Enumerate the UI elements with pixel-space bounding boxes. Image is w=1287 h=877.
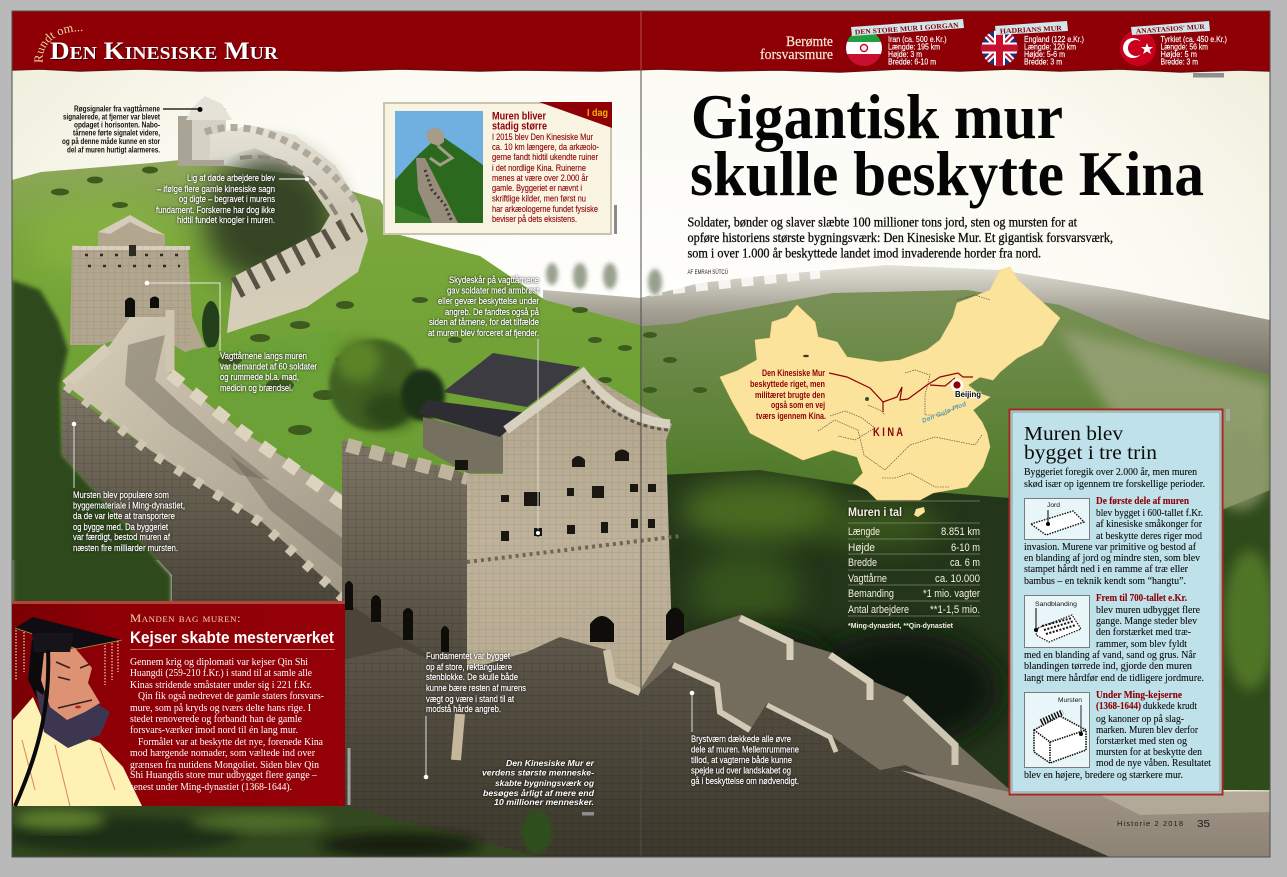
callout: Brystværn: gå i beskyttelse om nødvendigt.: [691, 776, 799, 787]
loopholes: [501, 450, 656, 541]
Beijing marker: Beijing: [955, 389, 981, 399]
body text: [492, 131, 599, 224]
forest on left edge: [12, 280, 172, 610]
step three text: (1368-1644): [1096, 701, 1141, 712]
table rows: Bredde: [848, 557, 877, 569]
left face merlons: [347, 445, 468, 478]
table rows: **1-1,5 mio.: [930, 604, 980, 616]
callout: Fundamentet: kunne bære resten af murens: [426, 683, 526, 694]
Gorgan facts: [888, 34, 947, 66]
left face of tower: [342, 440, 467, 672]
wall tag: Hadrian: HADRIANS MUR: [1000, 24, 1063, 35]
red corner: I dag: I dag: [587, 107, 608, 119]
heading: stadig større: [492, 120, 547, 132]
heading: [492, 110, 547, 132]
callout: Fundamentet: [424, 651, 526, 779]
body text: mod hærgende nomader, som væltede ind over: [130, 748, 315, 759]
step two text: blandingen tørrede ind, gjorde den muren: [1024, 661, 1192, 672]
body text: senest under Ming-dynastiet (1368-1644).: [130, 782, 292, 793]
body text: gamle. Byggeriet er nævnt i: [492, 182, 582, 193]
crown board: [15, 617, 122, 649]
map note: også som en vej: [771, 400, 825, 410]
panel: Manden bag muren: [12, 601, 345, 806]
step three text: blev en højere, bredere og stærkere mur.: [1024, 770, 1183, 781]
body text: forsvars-værker imod nord til én lang mur.: [130, 725, 298, 736]
grey end tag: [582, 812, 594, 816]
step two text: blev muren udbygget flere: [1096, 605, 1200, 616]
step two text: [1024, 593, 1204, 684]
wall tag: Hadrian: [995, 21, 1068, 35]
Anastasios facts: [1160, 34, 1227, 66]
header band with torn edge: [12, 11, 1270, 72]
callout: Skydeskår: [428, 275, 542, 537]
label: Berømte forsvarsmure: Berømte: [786, 34, 833, 50]
left face lower: [342, 600, 426, 656]
diagram: Jord: [1024, 498, 1090, 540]
callout: Brystværn: tillod, at vagterne både kunne: [691, 755, 792, 766]
grey end tag: [614, 205, 617, 234]
callout: Røgsignaler: del af muren hurtigt alarmeres.: [67, 145, 160, 155]
front wall: [467, 371, 672, 700]
step three text: [1024, 690, 1211, 781]
hair: [28, 640, 76, 700]
table rows: *1 mio. vagter: [923, 588, 980, 600]
intro paragraph: som i over 1.000 år beskyttede landet imod invaderende horder fra nord.: [688, 246, 1041, 261]
Yellow River label: Den Gule Flod: [921, 400, 968, 425]
callout: Mursten: da de var lette at transportere: [73, 511, 175, 522]
callout: Lig af døde arbejdere: fundament. Forskerne har dog ikke: [156, 205, 275, 216]
byline: AF EMRAH SÜTCÜ: [688, 269, 728, 276]
shrubs on hills: [51, 166, 707, 435]
callout: Røgsignaler: [62, 104, 202, 155]
step three text: dukkede krudt: [1143, 701, 1197, 712]
closing italic statement: verdens største menneske-: [482, 768, 594, 778]
wall tag: Gorgan: DEN STORE MUR I GORGAN: [855, 21, 959, 36]
table rows: Bemanding: [848, 588, 894, 600]
grey end tag: [1193, 73, 1224, 78]
rivers: [818, 295, 990, 487]
kicker: Rundt om: Rundt om...: [34, 26, 82, 63]
China shape: [720, 267, 1060, 500]
wall walkway in foreground left: [62, 310, 352, 612]
Anastasios facts: Længde: 56 km: [1160, 42, 1208, 52]
main headline: skulle beskytte Kina: [690, 138, 1204, 209]
step three text: mursten for at beskytte den: [1096, 747, 1202, 758]
Hadrian facts: Længde: 120 km: [1024, 42, 1076, 52]
callout: Skydeskår: Skydeskår på vagttårnene: [449, 275, 539, 286]
callout: Lig af døde arbejdere: hidtil fundet knogler i muren.: [177, 215, 275, 226]
callout: Mursten: var færdigt, bestod muren af: [73, 532, 170, 543]
folio: Historie 2 2018, page 35: 35: [1197, 819, 1211, 830]
right hillside: [640, 290, 1270, 510]
label: Berømte forsvarsmure: forsvarsmure: [760, 47, 833, 63]
intro paragraph: [688, 215, 1113, 261]
black cord: [15, 650, 48, 806]
body text: har arkæologerne fundet fysiske: [492, 203, 598, 214]
callout: Skydeskår: angreb. De fandtes også på: [445, 307, 540, 318]
KINA label: K I N A: [873, 427, 903, 439]
table rows: [848, 526, 980, 616]
section title: [34, 26, 280, 65]
callout: Lig af døde arbejdere: og digte – begravet i murens: [179, 194, 275, 205]
kicker: Manden bag muren:: [130, 613, 241, 625]
step one text: stampet hårdt ned i en ramme af træ eller: [1024, 564, 1189, 575]
body text: Qin fik også nedrevet de gamle staters forsvars-: [138, 691, 324, 702]
step one text: bambus – en teknik kendt som “hangtu”.: [1024, 576, 1186, 587]
folio: Historie 2 2018, page 35: Historie 2 2018: [1117, 819, 1183, 828]
map note: Den Kinesiske Mur: [762, 368, 825, 378]
callout: Mursten: næsten fire milliarder mursten.: [73, 543, 178, 554]
grass highlights: [46, 218, 120, 268]
intro: [1024, 467, 1205, 490]
body text: beviser på dets eksistens.: [492, 213, 577, 224]
heading: bygget i tre trin: [1024, 442, 1157, 464]
tassels: [16, 630, 118, 685]
callout: Fundamentet: vægt og være i stand til at: [426, 694, 514, 705]
step three text: mod de nye våben. Resultatet: [1096, 758, 1211, 769]
table title: Muren i tal: [848, 505, 902, 519]
icon: Turkey flag: [1120, 30, 1156, 66]
step one text: at beskytte deres riger mod: [1096, 531, 1202, 542]
closing italic statement: Den Kinesiske Mur er: [506, 758, 595, 768]
intro: Byggeriet foregik over 2.000 år, men muren: [1024, 467, 1197, 478]
diagram: Sandblanding: [1024, 596, 1090, 648]
step one text: en blanding af jord og mindre sten, som blev: [1024, 553, 1201, 564]
map note: militæret brugte den: [755, 390, 825, 400]
shaded hollow inside wall ring: [204, 154, 336, 286]
heading: Muren blev: [1024, 423, 1123, 445]
step three text: marken. Muren blev derfor: [1096, 725, 1199, 736]
callout: Brystværn: dele af muren. Mellemrummene: [691, 744, 799, 756]
forest on right page: [660, 430, 1276, 800]
heading: Muren bliver: [492, 110, 547, 122]
Anastasios facts: Tyrkiet (ca. 450 e.Kr.): [1160, 34, 1227, 44]
callout: Fundamentet: modstå hårde angreb.: [426, 704, 501, 715]
callout: Mursten: byggemateriale i Ming-dynastiet,: [73, 500, 185, 512]
callout: Fundamentet: op af store, rektangulære: [426, 662, 512, 673]
callout: Vagttårnene: Vagttårnene langs muren: [220, 351, 307, 362]
intro paragraph: opføre historiens største bygningsværk: Den Kinesiske Mur. Et gigantisk forsvarsværk,: [688, 230, 1113, 245]
callout: Vagttårnene: var bemandet af 60 soldater: [220, 362, 318, 372]
table rows: 8.851 km: [941, 526, 980, 538]
heading rule: [130, 648, 335, 650]
map note: [750, 368, 826, 421]
footnote: *Ming-dynastiet, **Qin-dynastiet: [848, 623, 954, 630]
step two text: rammer, som blev fyldt: [1096, 639, 1187, 650]
far battlement row: [640, 615, 1008, 802]
body text: mure, som på kryds og tværs delte hans rige. I: [130, 703, 311, 714]
closing italic statement: 10 millioner mennesker.: [494, 797, 594, 807]
body text: Huangdi (259-210 f.Kr.) i stand til at samle alle: [130, 668, 312, 679]
callout: Skydeskår: eller gevær beskyttelse under: [438, 296, 540, 307]
body text: [130, 657, 324, 793]
Gorgan facts: Bredde: 6-10 m: [888, 56, 936, 66]
robe: [13, 697, 142, 806]
Anastasios facts: Højde: 5 m: [1160, 49, 1197, 59]
callout: Lig af døde arbejdere: Lig af døde arbejdere blev: [187, 173, 275, 184]
table rows: Antal arbejdere: [848, 604, 909, 616]
main headline: [690, 81, 1204, 209]
callout: Mursten: [72, 422, 185, 554]
callout: Brystværn: spejde ud over landskabet og: [691, 766, 791, 776]
table rows: Højde: [848, 542, 875, 554]
panel: Muren blev bygget i tre trin: [1010, 409, 1230, 794]
distant wall on right page: [543, 263, 1270, 380]
body text: grænsen fra nutidens Mongoliet. Siden blev Qin: [130, 760, 320, 771]
foreground wall with battlements: [342, 615, 1270, 860]
roofs: [443, 353, 580, 407]
callout: Skydeskår: gav soldater med armbrøst: [447, 286, 539, 296]
callout: Vagttårnene: og rummede bl.a. mad,: [220, 372, 299, 383]
lit merlon edges: [607, 650, 640, 692]
Gorgan facts: Iran (ca. 500 e.Kr.): [888, 34, 947, 44]
spine line: [640, 70, 642, 857]
step one text: [1024, 496, 1203, 587]
pale hill right of map: [1060, 330, 1270, 510]
near hilltop watchtower: [70, 215, 205, 352]
diagram: Jord: Jord: [1047, 502, 1060, 509]
face: [41, 648, 100, 720]
label: Berømte forsvarsmure: [760, 34, 833, 63]
callout: Lig af døde arbejdere: – ifølge flere gamle kinesiske sagn: [157, 184, 275, 195]
red card: [12, 602, 345, 806]
table rows: ca. 10.000: [935, 573, 980, 585]
panel: I dag: [384, 102, 612, 234]
map note: tværs igennem Kina.: [756, 411, 826, 421]
intro: skød især op igennem tre forskellige perioder.: [1024, 479, 1205, 490]
body text: I 2015 blev Den Kinesiske Mur: [492, 131, 593, 142]
big bushes left of main tower: [329, 338, 445, 431]
dark bush by tower: [202, 301, 220, 349]
facial features: [56, 662, 92, 708]
map of China: [720, 267, 1060, 517]
step one text: af kinesiske småkonger for: [1096, 519, 1203, 530]
Beijing marker: [950, 378, 981, 399]
red corner: I dag: [539, 102, 612, 128]
step two text: med en blanding af vand, sand og grus. Når: [1024, 650, 1197, 661]
body text: ca. 10 km længere, da arkæolo-: [492, 141, 599, 152]
body text: gerne fandt hidtil ukendte ruiner: [492, 151, 598, 162]
intro paragraph: Soldater, bønder og slaver slæbte 100 millioner tons jord, sten og mursten for at: [688, 215, 1077, 230]
table rows: Længde: [848, 526, 880, 538]
body text: Formålet var at beskytte det nye, forenede Kina: [138, 737, 323, 748]
callout: Lig af døde arbejdere: [156, 173, 309, 226]
step three text: og kanoner op på slag-: [1096, 714, 1185, 725]
arched windows: [345, 581, 684, 652]
grass below walkway highlight: [190, 332, 329, 351]
step three text: forstærket med sten og: [1096, 736, 1187, 747]
callout: Røgsignaler: opdaget i horisonten. Nabo-: [74, 120, 160, 130]
wall walkway bottom right: [900, 770, 1270, 857]
body text: Kinas stridende småstater under sig i 221 f.Kr.: [130, 680, 312, 691]
Hainan island: [914, 507, 925, 517]
body text: skriftlige kilder, men først nu: [492, 193, 586, 204]
callout: Røgsignaler: signalerede, at fjerner var blevet: [63, 112, 160, 122]
callout: Brystværn: [690, 691, 799, 787]
callout: Fundamentet: Fundamentet var bygget: [426, 651, 510, 662]
panel card: [384, 103, 611, 234]
callout: Røgsignaler: Røgsignaler fra vagttårnene: [74, 104, 160, 114]
callout: Vagttårnene: [145, 281, 318, 394]
step one text: invasion. Murene var primitive og bestod af: [1024, 542, 1197, 553]
main watchtower: [342, 353, 684, 688]
table rules: [848, 501, 980, 616]
closing italic statement: besøges årligt af mere end: [483, 788, 595, 798]
table rows: Vagttårne: [848, 573, 887, 585]
callout: Mursten: Mursten blev populære som: [73, 490, 169, 501]
near wall body: [342, 637, 1120, 857]
blue card: [1010, 410, 1222, 794]
curved distant wall: [178, 96, 368, 333]
step one text: blev bygget i 600-tallet f.Kr.: [1096, 508, 1203, 519]
decorative stone band: [467, 536, 680, 562]
Gorgan facts: Længde: 195 km: [888, 42, 940, 52]
Anastasios facts: Bredde: 3 m: [1160, 56, 1198, 66]
table rows: ca. 6 m: [950, 557, 980, 569]
callout: Vagttårnene: medicin og brændsel.: [220, 383, 293, 394]
body text: stedet renoverede og forbandt han de gamle: [130, 714, 302, 725]
step three text: Under Ming-kejserne: [1096, 690, 1182, 701]
map note: beskyttede riget, men: [750, 379, 825, 389]
callout: Fundamentet: stenblokke. De skulle både: [426, 672, 518, 683]
Hadrian facts: [1024, 34, 1084, 66]
portrait: Emperor Qin Shi Huang: [13, 617, 142, 806]
title text: Den Kinesiske Mur: [50, 38, 279, 65]
grey end tag: [348, 748, 350, 805]
gable trim: [506, 373, 670, 430]
heading: Kejser skabte mesterværket: [130, 628, 334, 647]
lake details: [803, 355, 809, 357]
photo: wall on green mountain: [395, 111, 483, 223]
body text: Gennem krig og diplomati var kejser Qin Shi: [130, 657, 308, 668]
diagram: Mursten: [1024, 692, 1090, 768]
table: Muren i tal: [848, 501, 980, 630]
callout: Skydeskår: siden af tårnene, for det tilfælde: [429, 317, 539, 328]
upper room side wall: [423, 417, 503, 473]
step two text: gange. Mange steder blev: [1096, 616, 1198, 627]
wall tag: Anastasios: ANASTASIOS' MUR: [1136, 23, 1206, 35]
callout: Røgsignaler: og på denne måde kunne en stor: [62, 136, 160, 146]
main headline: Gigantisk mur: [691, 81, 1063, 152]
closing italic statement: [482, 758, 595, 807]
closing italic statement: skabte bygningsværk og: [495, 778, 595, 788]
step two text: langt mere hårdfør end de tidligere jordmure.: [1024, 673, 1204, 684]
left hillside: [12, 160, 640, 560]
Hadrian facts: England (122 e.Kr.): [1024, 34, 1084, 44]
body text: Shi Huangdis store mur udbygget flere gange –: [130, 770, 318, 781]
callout: Mursten: og bygge med. Da byggeriet: [73, 522, 168, 533]
grey end tag: [1226, 409, 1230, 421]
body text: menes at være over 2.000 år: [492, 172, 588, 183]
Great Wall red line: [829, 373, 973, 412]
Gorgan facts: Højde: 3 m: [888, 49, 922, 59]
icon: UK flag: [981, 30, 1018, 66]
famous defensive walls strip: [760, 19, 1227, 66]
diagram: Sandblanding: Sandblanding: [1035, 601, 1077, 608]
callout: Brystværn: Brystværn dækkede alle øvre: [691, 734, 791, 745]
step one text: De første dele af muren: [1096, 496, 1189, 507]
table rows: 6-10 m: [951, 542, 980, 554]
forest strip bottom left: [0, 806, 552, 857]
heading: [1024, 423, 1157, 464]
callout: Røgsignaler: tårnene førte signalet videre,: [73, 128, 160, 138]
folio: Historie 2 2018, page 35: [1117, 819, 1211, 830]
step two text: Frem til 700-tallet e.Kr.: [1096, 593, 1187, 604]
beard: [36, 690, 110, 748]
callout: Skydeskår: at muren blev forceret af fjender.: [428, 328, 539, 339]
Hadrian facts: Højde: 5-6 m: [1024, 49, 1065, 59]
Hadrian facts: Bredde: 3 m: [1024, 56, 1062, 66]
step two text: den forstærket med træ-: [1096, 627, 1192, 638]
body text: i det nordlige Kina. Ruinerne: [492, 162, 586, 173]
icon: Iran flag: [846, 34, 882, 66]
diagram: Mursten: Mursten: [1058, 697, 1082, 704]
